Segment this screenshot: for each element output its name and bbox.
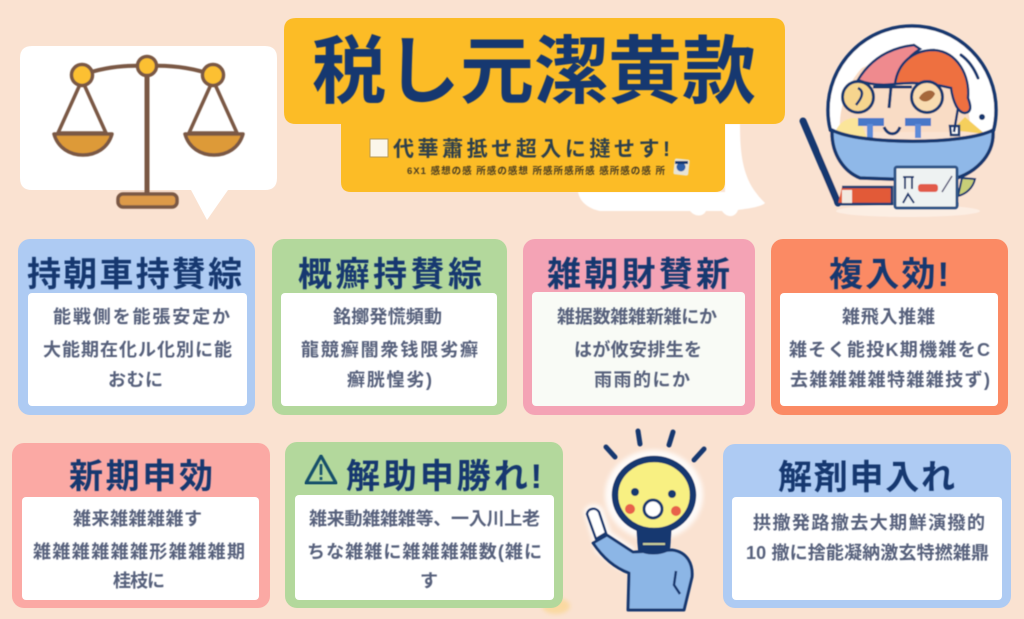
bulb head (615, 459, 693, 531)
white blob behind title (578, 124, 765, 216)
panel: card 5 (12, 443, 270, 608)
icon: warning triangle (306, 456, 336, 483)
panel: speech bubble with scales (20, 46, 277, 220)
light rays (606, 431, 704, 460)
icon: lightbulb character (584, 431, 704, 610)
small blue icon (673, 158, 690, 176)
neck (636, 526, 672, 554)
card 2 body text (301, 306, 478, 390)
panel: card 3 (523, 239, 755, 415)
card 5 body text (33, 509, 245, 591)
panel: title banner (284, 18, 785, 192)
card 6 body text: す (420, 571, 438, 591)
card 5 body text: 雑雑雑雑雑雑形雑雑雑期 (33, 542, 245, 562)
card 2 body text: 癬胱惶劣) (347, 370, 432, 390)
card 2 body text: 龍競癬闇衆钱限劣癬 (301, 340, 478, 360)
card 3 body text: はが攸安排生を (574, 339, 702, 360)
card 1 body text: 大能期在化ル化別に能 (43, 340, 232, 360)
card 3 body text: 雑据数雑雑新雑にか (557, 307, 717, 327)
finger (587, 509, 606, 539)
small caption: 6X1 感想の感 所感の感想 所感所感所感 感所感の感 所 (407, 165, 665, 177)
subtitle: 代華蕭抵せ超入に撻せす! (393, 138, 670, 161)
panel: card 7 (723, 444, 1011, 608)
card 7 heading: 解剤申入れ (778, 459, 955, 497)
card 5 heading: 新期申効 (69, 458, 213, 496)
card 6 body text: ちな雑雑に雑雑雑雑数(雑に (307, 542, 542, 562)
card 7 body text: 10 撤に捨能凝納激玄特撚雑鼎 (746, 542, 989, 563)
icon: robot character in dome (803, 26, 1004, 217)
title: 税し元潔黄款 (312, 30, 756, 113)
card 3 body text (557, 307, 717, 390)
panel: card 2 (272, 239, 507, 415)
card 2 body text: 銘擲発慌頻動 (333, 306, 442, 327)
card 7 body text: 拱撤発路撤去大期鮮演撥的 (753, 513, 985, 533)
card 4 heading: 複入効! (829, 256, 949, 294)
card 4 body text: 雑そく能投K期機雑をC (789, 340, 990, 360)
checkbox icon (370, 139, 388, 157)
card 5 body text: 雑来雑雑雑雑す (73, 509, 202, 529)
card 4 body text (789, 307, 990, 390)
card 1 heading: 持朝車持賛綜 (27, 256, 242, 294)
card 3 body text: 雨雨的にか (594, 370, 690, 390)
card 1 body text (43, 306, 232, 390)
card 1 body text: おむに (108, 370, 163, 390)
card 4 body text: 去雑雑雑雑特雑雑技ず) (790, 370, 990, 390)
icon: balance scales (54, 56, 243, 207)
arm and body (593, 535, 692, 610)
panel: card 1 (18, 239, 255, 415)
card 4 body text: 雑飛入推雑 (842, 307, 935, 327)
card 7 body text (746, 513, 989, 563)
panel: card 6 (285, 442, 570, 614)
card 2 heading: 概癬持賛綜 (298, 256, 482, 294)
card 1 body text: 能戦側を能張安定か (53, 306, 230, 327)
card 6 body text (307, 508, 542, 591)
card 3 heading: 雑朝財賛新 (547, 256, 730, 294)
card 6 heading: 解助申勝れ! (346, 458, 542, 496)
panel: card 4 (771, 239, 1008, 415)
card 6 body text: 雑来動雑雑雑等、一入川上老 (309, 508, 540, 529)
card 5 body text: 桂枝に (113, 571, 165, 591)
